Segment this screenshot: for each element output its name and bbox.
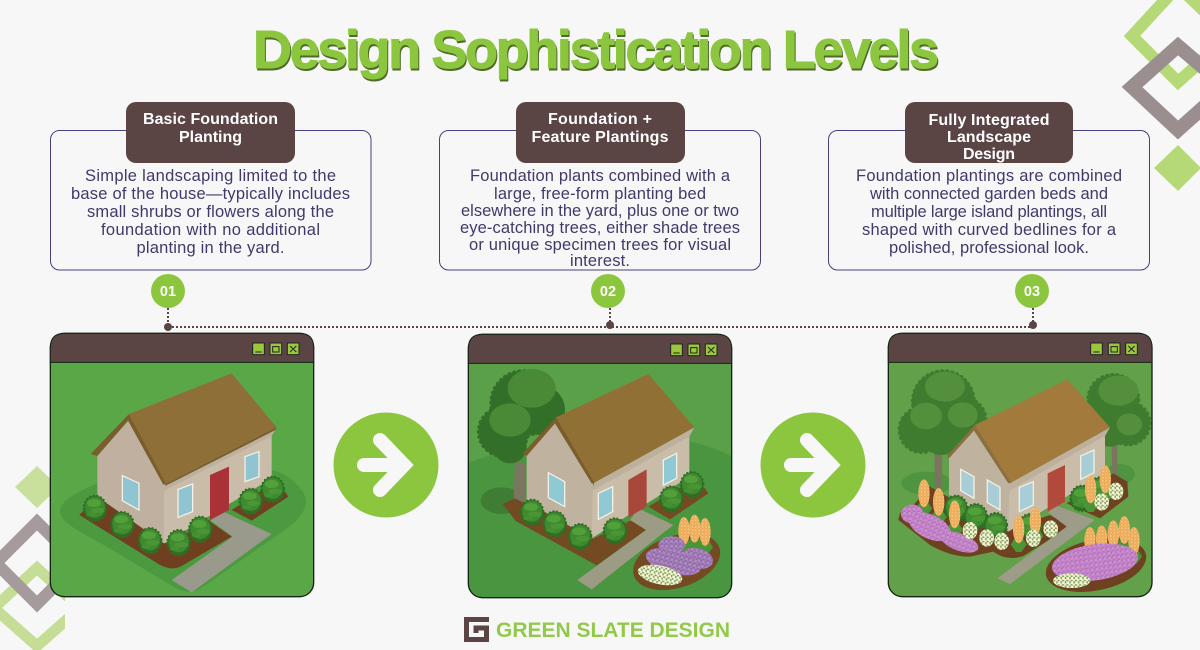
- title: Design Sophistication Levels: [253, 20, 939, 80]
- body text: level 1: small shrubs or flowers along the: [87, 203, 334, 221]
- body text: level 2: large, free-form planting bed: [494, 185, 706, 203]
- step number 01: 01: [160, 284, 176, 300]
- body text: level 1: Simple landscaping limited to the: [85, 167, 336, 185]
- arrow 1: [334, 412, 438, 518]
- logo icon: spiral G: [466, 620, 489, 640]
- timeline connector: [164, 308, 1037, 331]
- body text: level 2: elsewhere in the yard, plus one or two: [461, 202, 739, 220]
- heading tag: level 2: [516, 102, 685, 163]
- body text: level 3: [856, 167, 1122, 257]
- body text: level 1: [71, 167, 350, 257]
- heading tag: level 2: Foundation +: [548, 111, 652, 128]
- body text: level 1: foundation with no additional: [101, 221, 320, 239]
- body text: level 3: multiple large island plantings, all: [871, 203, 1107, 221]
- step number 01: [151, 274, 185, 308]
- body text: level 2: interest.: [570, 252, 630, 270]
- panel: level 1 description: [50, 102, 371, 270]
- logo: [466, 619, 730, 642]
- body text: level 1: planting in the yard.: [136, 239, 284, 257]
- step number 02: 02: [600, 284, 616, 300]
- body text: level 2: Foundation plants combined with a: [470, 167, 731, 185]
- body text: level 3: shaped with curved bedlines for a: [862, 221, 1117, 239]
- illustration window 2: foundation + feature plantings: [468, 334, 732, 600]
- panel: level 3 description: [828, 102, 1150, 270]
- body text: level 2: eye-catching trees, either shade trees: [460, 219, 740, 237]
- heading tag: level 3: Fully Integrated: [928, 112, 1050, 129]
- body text: level 1: base of the house—typically includes: [71, 185, 350, 203]
- heading tag: level 1: Basic Foundation: [143, 111, 278, 128]
- step number 03: 03: [1024, 284, 1040, 300]
- illustration window 3: fully integrated landscape design: [888, 333, 1152, 600]
- illustration window 1: basic foundation planting: [50, 333, 314, 597]
- body text: level 3: polished, professional look.: [889, 239, 1089, 257]
- body text: level 3: Foundation plantings are combined: [856, 167, 1122, 185]
- logo wordmark: GREEN SLATE DESIGN: [496, 619, 730, 642]
- heading tag: level 3: [905, 102, 1073, 163]
- heading tag: level 1: [126, 102, 295, 163]
- heading tag: level 3: Landscape: [947, 129, 1031, 146]
- heading tag: level 2: Feature Plantings: [532, 129, 669, 146]
- body text: level 2: [460, 167, 740, 270]
- body text: level 3: with connected garden beds and: [869, 185, 1108, 203]
- decoration: bottom left diamonds: [0, 466, 65, 650]
- decoration: top right diamonds: [1132, 0, 1200, 191]
- panel: level 2 description: [440, 102, 760, 270]
- arrow 2: [760, 412, 866, 518]
- heading tag: level 3: Design: [963, 146, 1015, 163]
- body text: level 2: or unique specimen trees for visual: [469, 236, 731, 254]
- step number 02: [591, 274, 625, 308]
- step number 03: [1015, 274, 1049, 308]
- heading tag: level 1: Planting: [179, 129, 242, 146]
